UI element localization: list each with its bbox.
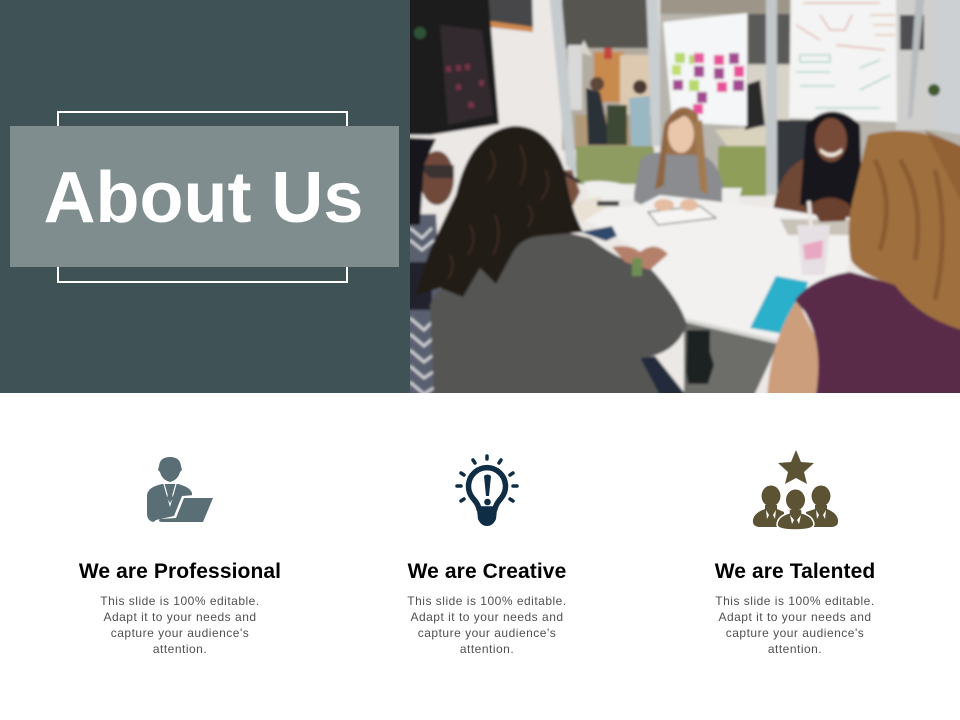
photo: team meeting around a table — [410, 0, 960, 393]
people behind glass — [586, 88, 611, 145]
whiteboard 2 — [789, 0, 897, 122]
center woman: hair, sweater, face — [654, 107, 706, 205]
grey-shirt woman: curly hair — [415, 126, 583, 297]
green sofa — [576, 146, 654, 184]
table — [570, 195, 870, 344]
whiteboard 1 — [663, 13, 747, 126]
column: We are Professional — [78, 457, 281, 656]
body text: This slide is 100% editable. Adapt it to your needs and capture your audience's attention. — [715, 594, 875, 656]
hands center woman — [654, 199, 674, 211]
title band — [10, 126, 399, 267]
column: We are Talented — [714, 450, 875, 656]
hands right woman — [810, 198, 850, 222]
second room — [660, 0, 960, 195]
right woman: hair, top, face — [773, 158, 867, 222]
notebook, papers — [648, 206, 716, 225]
column: We are Creative — [407, 454, 567, 656]
blue folder — [750, 276, 808, 336]
TV on wall — [395, 0, 499, 135]
heading: We are Talented — [715, 560, 875, 583]
floor — [684, 322, 778, 400]
title: About Us — [44, 158, 363, 238]
laptop — [780, 219, 855, 235]
left woman — [395, 214, 446, 400]
grey-shirt woman: shirt — [430, 225, 687, 400]
glass frames right — [766, 0, 777, 195]
icon: professional at laptop — [147, 457, 213, 522]
icon: light bulb — [455, 454, 519, 526]
room behind glass — [562, 0, 652, 150]
front-right woman: arm, shirt, hair — [767, 300, 822, 400]
panel: title background — [0, 0, 410, 393]
body text: This slide is 100% editable. Adapt it to your needs and capture your audience's attention. — [100, 594, 260, 656]
upper window — [483, 0, 533, 32]
glass frames — [549, 0, 577, 176]
body text: This slide is 100% editable. Adapt it to your needs and capture your audience's attention. — [407, 594, 567, 656]
heading: We are Professional — [79, 560, 281, 583]
heading: We are Creative — [408, 560, 566, 583]
cup — [797, 225, 830, 275]
icon: team with star — [752, 450, 838, 530]
title outline frame — [57, 111, 348, 283]
